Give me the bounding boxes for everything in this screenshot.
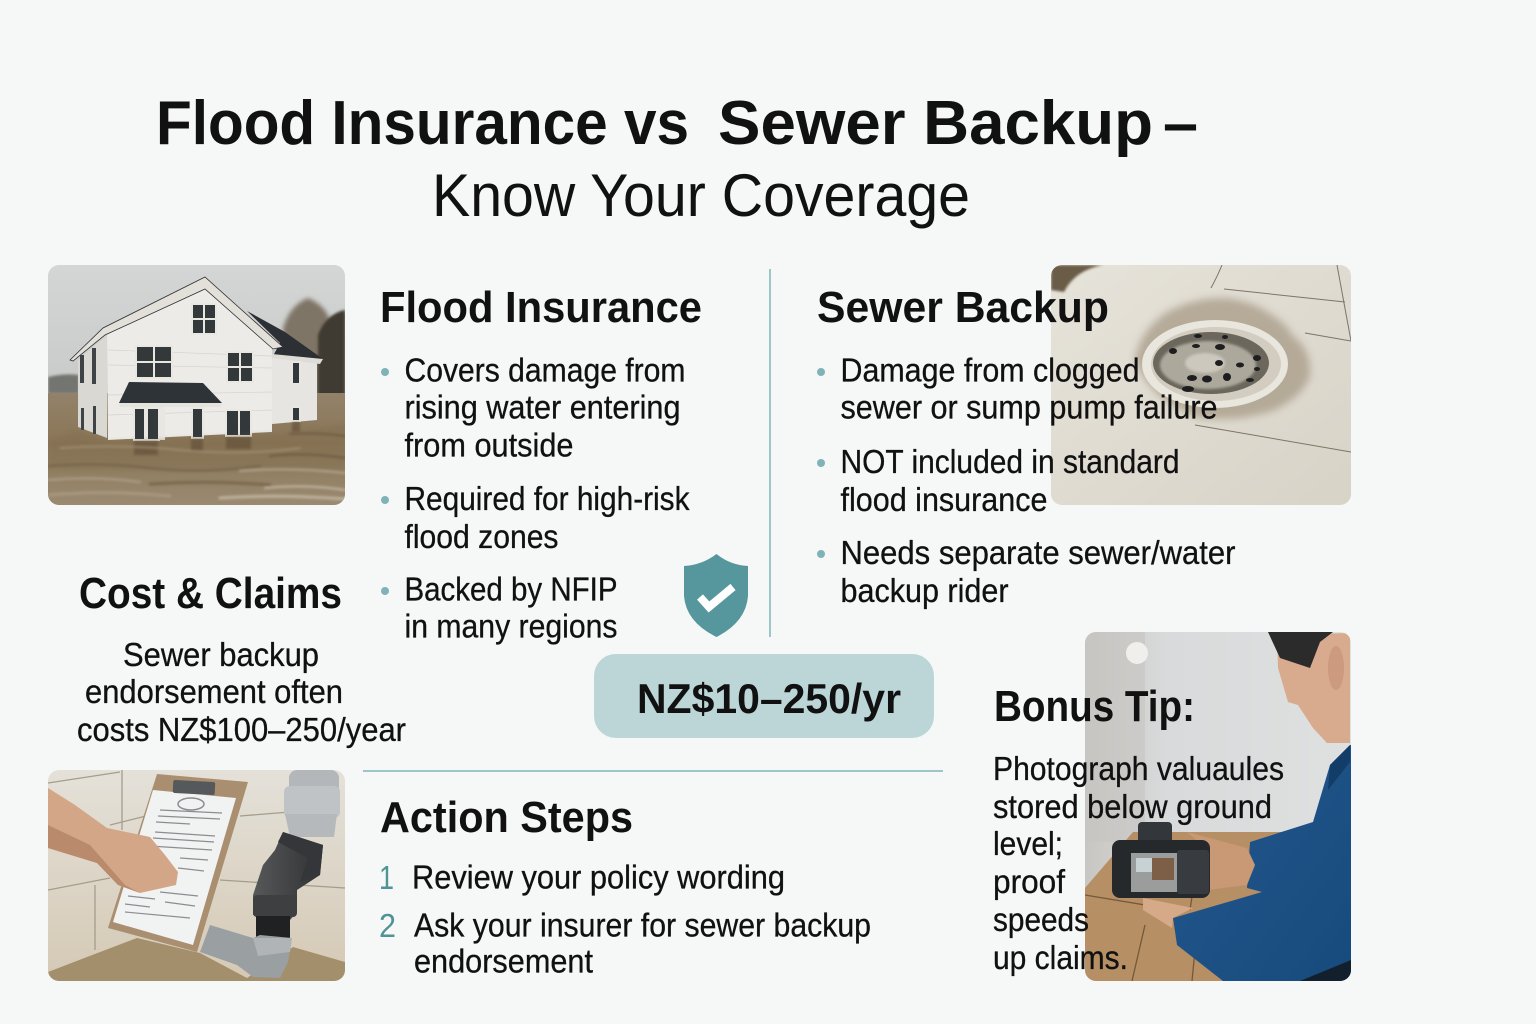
text: cost detail: Sewer backup <box>123 636 319 673</box>
text: bonus tip detail: stored below ground <box>993 788 1272 825</box>
list: sewer backup bullets: backup rider <box>840 572 1008 609</box>
text: cost detail: endorsement often <box>85 673 343 710</box>
photo: flooded house <box>48 265 345 505</box>
callout: price pill: NZ$10–250/yr <box>637 675 901 722</box>
list: flood insurance bullets: rising water entering <box>404 388 680 426</box>
title: – <box>1163 89 1198 158</box>
list: action steps: 2 <box>379 907 396 944</box>
list: sewer backup bullets: Needs separate sewer/water <box>840 534 1236 571</box>
text: bonus tip detail: Photograph valuaules <box>993 750 1284 787</box>
heading: Flood Insurance: Flood Insurance <box>380 283 702 332</box>
heading: Action Steps: Action Steps <box>380 793 633 842</box>
list: sewer backup bullets: Damage from clogged <box>840 352 1140 388</box>
list: flood insurance bullets: Covers damage from <box>404 352 686 388</box>
upper grey pipe <box>284 770 340 837</box>
list: action steps <box>379 858 871 980</box>
list: flood insurance bullets <box>381 352 690 644</box>
list: sewer backup bullets: sewer or sump pump failure <box>840 388 1218 426</box>
list: flood insurance bullets: Backed by NFIP <box>404 570 618 608</box>
text: bonus tip detail: up claims. <box>993 939 1128 976</box>
text: bonus tip detail <box>993 750 1284 976</box>
list: flood insurance bullets: in many regions <box>404 608 618 644</box>
list: action steps: Review your policy wording <box>412 858 785 896</box>
heading: Sewer Backup: Sewer Backup <box>817 283 1109 332</box>
text: bonus tip detail: proof <box>993 863 1066 900</box>
title: Sewer Backup <box>718 89 1153 158</box>
icon: shield with check <box>684 554 748 637</box>
text: bonus tip detail: speeds <box>993 901 1089 938</box>
title: Know Your Coverage <box>432 162 970 229</box>
list: sewer backup bullets: NOT included in standard <box>840 443 1180 480</box>
photo: policy clipboard and pipe <box>48 770 345 981</box>
list: sewer backup bullets <box>817 352 1236 609</box>
list: flood insurance bullets: Required for high-risk <box>404 480 690 517</box>
list: sewer backup bullets: flood insurance <box>840 481 1048 518</box>
title: Flood Insurance vs <box>156 89 689 158</box>
list: action steps: Ask your insurer for sewer backup <box>414 906 871 944</box>
photo: man photographing valuables <box>1085 632 1351 981</box>
heading: Cost & Claims: Cost & Claims <box>79 569 342 618</box>
text: cost detail <box>77 636 406 748</box>
text: bonus tip detail: level; <box>993 825 1063 862</box>
photo: clogged floor drain <box>1051 265 1351 505</box>
heading: Bonus Tip: Bonus Tip: <box>994 682 1195 731</box>
callout: price pill <box>594 654 934 738</box>
list: flood insurance bullets: from outside <box>404 426 574 464</box>
title <box>156 89 1198 229</box>
text: cost detail: costs NZ$100–250/year <box>77 711 406 748</box>
list: action steps: 1 <box>379 859 394 896</box>
list: flood insurance bullets: flood zones <box>404 518 558 555</box>
list: action steps: endorsement <box>414 942 593 980</box>
